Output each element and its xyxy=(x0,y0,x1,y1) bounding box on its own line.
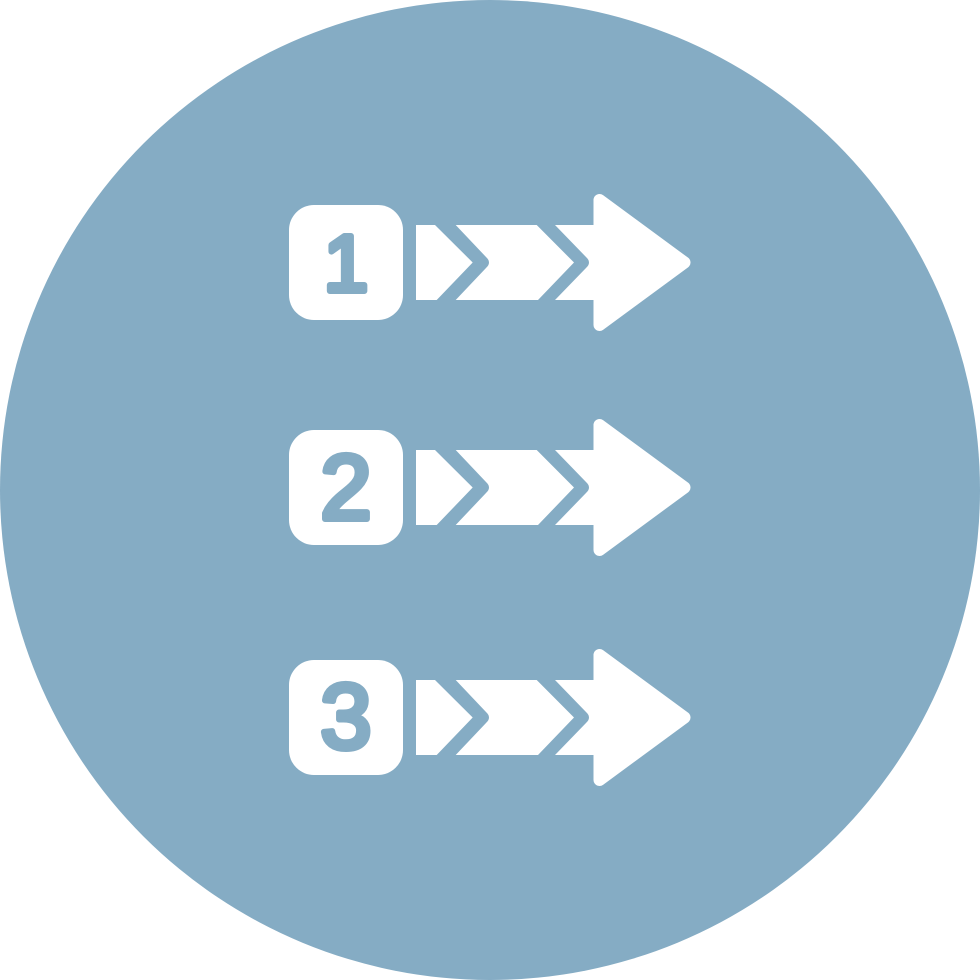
step 1 row xyxy=(289,200,684,325)
number badge 3 xyxy=(289,660,403,775)
number badge 1 xyxy=(289,205,403,320)
number badge 2 xyxy=(289,430,403,545)
arrow 1 xyxy=(416,200,684,325)
step 3 row xyxy=(289,655,684,780)
arrow 2 xyxy=(416,425,684,550)
step 2 row xyxy=(289,425,684,550)
number badge 1: 1 xyxy=(324,219,368,308)
number badge 3: 3 xyxy=(320,666,372,768)
arrow 3 xyxy=(416,655,684,780)
number badge 2: 2 xyxy=(320,437,372,539)
